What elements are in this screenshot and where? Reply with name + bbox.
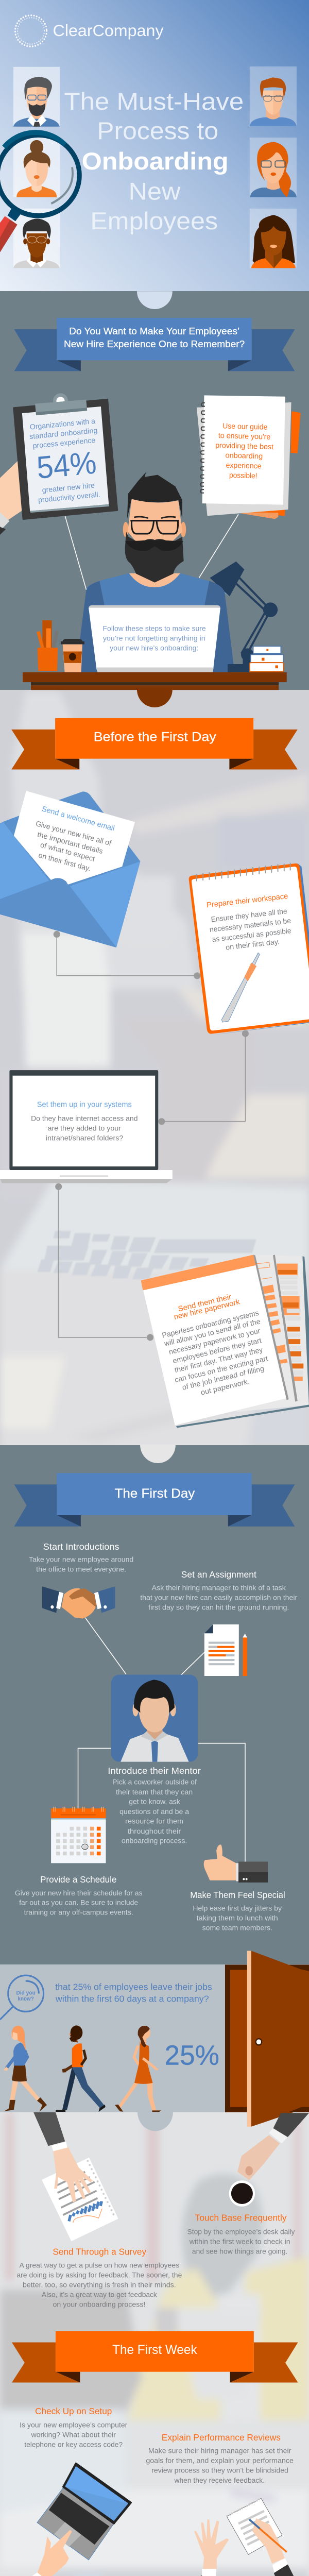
laptop with intro copy: your new hire’s onboarding: xyxy=(110,643,198,652)
portrait cards xyxy=(13,66,297,268)
ribbon heading: the first week xyxy=(12,2331,298,2382)
step: check up on setup: working? What about their xyxy=(30,2430,116,2439)
note text: send them their new hire paperwork: can focus on the exciting part xyxy=(174,1354,268,1384)
note text: use our guide: experience xyxy=(226,461,262,471)
step: introduce their mentor: Introduce their Mentor xyxy=(108,1766,201,1776)
illustration: woman walking in orange dress xyxy=(115,2026,161,2112)
step: set an assignment: Ask their hiring manager to think of a task xyxy=(152,1583,286,1592)
section: before the first day, lower xyxy=(0,1030,309,1428)
step: introduce their mentor: get to know, ask xyxy=(129,1797,180,1806)
section: the first day xyxy=(14,1445,298,1676)
step: send through a survey: Also, it’s a great way to get feedback xyxy=(42,2290,157,2298)
ribbon heading: the first day xyxy=(14,1473,295,1527)
avatar: red-haired woman xyxy=(250,142,297,197)
illustration: hand holding coffee mug xyxy=(229,2113,309,2207)
laptop with intro copy: Follow these steps to make sure xyxy=(103,624,206,633)
connector lines xyxy=(65,514,238,590)
avatar: woman with long dark hair xyxy=(251,215,296,268)
step: provide a schedule xyxy=(15,1874,143,1917)
card: mentor portrait xyxy=(111,1675,198,1762)
orange form on middle page xyxy=(256,1263,288,1364)
step: introduce their mentor: onboarding process. xyxy=(122,1836,187,1845)
note text: use our guide: possible! xyxy=(229,471,258,481)
stat text: 54 percent: Organizations with a xyxy=(29,416,96,431)
title: Onboarding xyxy=(82,147,229,175)
section: before the first day xyxy=(0,689,309,1035)
section background: did you know 25 percent xyxy=(0,1964,309,2112)
avatar: man with aviator glasses xyxy=(13,218,60,268)
ribbon heading: before the first day xyxy=(11,718,298,769)
step: make them feel special: Help ease first day jitters by xyxy=(193,1904,282,1912)
step: start introductions: Start Introductions xyxy=(43,1541,119,1552)
logo: ClearCompany: ClearCompany xyxy=(53,22,164,40)
note text: use our guide: providing the best xyxy=(215,442,273,451)
laptop with intro copy xyxy=(89,605,220,672)
section: hero xyxy=(0,15,297,268)
section background: first day slate xyxy=(0,1445,309,1964)
stat: 25 percent: 25% xyxy=(165,2040,219,2071)
step: start introductions: the office to meet everyone. xyxy=(36,1565,126,1573)
step: touch base frequently: Stop by the employee’s desk daily xyxy=(187,2227,295,2236)
ribbon heading: do you want: New Hire Experience One to Remember? xyxy=(64,338,245,349)
step: introduce their mentor: throughout their xyxy=(128,1826,181,1835)
section background: first week photo xyxy=(0,2112,309,2576)
step: make them feel special xyxy=(190,1890,285,1932)
note text: send them their new hire paperwork: Paperless onboarding systems xyxy=(161,1308,260,1340)
illustration: stacked books xyxy=(228,646,284,672)
step: send through a survey: better, too, so everything is fresh in their minds. xyxy=(23,2280,176,2289)
illustration: desk shelf xyxy=(23,672,287,690)
note text: send a welcome email: of what to expect xyxy=(40,840,96,863)
section: intro xyxy=(0,291,301,690)
step: introduce their mentor: their team that they can xyxy=(116,1787,193,1796)
note text: prepare their workspace: Ensure they have all the xyxy=(211,907,287,924)
note text: prepare their workspace: on their first day. xyxy=(225,937,280,952)
step: introduce their mentor: resource for them xyxy=(125,1817,183,1825)
stat text: 54 percent: process experience xyxy=(32,435,96,450)
step: touch base frequently xyxy=(187,2213,295,2256)
step: make them feel special: taking them to lunch with xyxy=(197,1913,278,1922)
illustration: lamp xyxy=(210,562,278,661)
title: New xyxy=(129,177,181,205)
title xyxy=(64,88,244,234)
stat text: 25 percent leave: within the first 60 days at a company? xyxy=(55,1993,209,2004)
note text: use our guide: to ensure you're xyxy=(218,432,271,442)
illustration: laptop with systems note: Do they have internet access and xyxy=(31,1114,138,1123)
notch connector xyxy=(137,689,173,707)
step: set an assignment xyxy=(140,1570,298,1612)
step: set an assignment: that your new hire can easily accomplish on their xyxy=(140,1593,298,1602)
note text: prepare their workspace: as successful as possible xyxy=(212,926,291,943)
logo: ClearCompany xyxy=(15,15,164,46)
illustration: spiral notebook with workspace note xyxy=(189,863,309,1035)
step: introduce their mentor: Pick a coworker outside of xyxy=(112,1777,197,1786)
note text: send a welcome email: on their first day. xyxy=(38,851,92,873)
notch connector xyxy=(137,291,173,309)
step: provide a schedule: Give your new hire their schedule for as xyxy=(15,1888,143,1897)
step: explain performance reviews xyxy=(146,2433,294,2484)
step: check up on setup xyxy=(20,2406,128,2448)
icon: schedule calendar xyxy=(51,1807,106,1863)
step: set an assignment: first day so they can hit the ground running. xyxy=(148,1603,289,1612)
step: touch base frequently: within the first week to check in xyxy=(189,2237,290,2246)
step: introduce their mentor xyxy=(108,1766,201,1845)
ribbon heading: the first day: The First Day xyxy=(115,1486,195,1501)
note text: send a welcome email xyxy=(35,805,115,873)
note text: use our guide: Use our guide xyxy=(222,422,268,432)
icon: did you know magnifier: know? xyxy=(18,1996,34,2002)
step: explain performance reviews: when they receive feedback. xyxy=(174,2476,265,2484)
step: provide a schedule: Provide a Schedule xyxy=(40,1874,117,1885)
connector lines xyxy=(78,1743,245,1862)
stat text: 54 percent xyxy=(29,416,100,504)
step: provide a schedule: training or any off-campus events. xyxy=(24,1908,133,1917)
title: Process to xyxy=(97,117,218,145)
icon: did you know magnifier xyxy=(0,1975,44,2020)
ribbon heading: do you want: Do You Want to Make Your Employees’ xyxy=(69,326,239,336)
note text: use our guide xyxy=(215,422,273,481)
illustration: paperwork stack xyxy=(141,1255,309,1428)
step: explain performance reviews: review process so they won’t be blindsided xyxy=(151,2466,288,2475)
illustration: writing hand on notepad xyxy=(227,2498,309,2576)
note text: send them their new hire paperwork xyxy=(161,1293,268,1397)
step: check up on setup: Check Up on Setup xyxy=(35,2406,112,2416)
note text: send them their new hire paperwork: will allow you to send all of the xyxy=(163,1317,261,1348)
icon: assignment document and pencil xyxy=(204,1624,247,1676)
step: make them feel special: some team members. xyxy=(202,1923,272,1932)
section: touch base and survey xyxy=(16,2112,309,2309)
note text: send them their new hire paperwork: of the job instead of filling xyxy=(181,1364,265,1392)
note text: send them their new hire paperwork: out paperwork. xyxy=(200,1377,250,1397)
step: introduce their mentor: questions of and be a xyxy=(119,1807,189,1816)
orange form on back page xyxy=(277,1264,303,1381)
illustration: man walking with orange shirt xyxy=(56,2025,106,2112)
note text: send them their new hire paperwork: employees before they start xyxy=(172,1336,262,1365)
connector: envelope to notebook xyxy=(54,931,200,979)
step: provide a schedule: far out as you can. Be sure to include xyxy=(19,1898,139,1907)
illustration: laptop with systems note: are they added to your xyxy=(48,1124,121,1132)
step: start introductions xyxy=(29,1541,133,1573)
title: The Must-Have xyxy=(64,88,244,115)
stat text: 54 percent: 54% xyxy=(36,445,98,485)
step: send through a survey xyxy=(16,2247,182,2309)
stat text: 54 percent: productivity overall. xyxy=(38,490,100,504)
step: explain performance reviews: Make sure their hiring manager has set their xyxy=(148,2446,291,2455)
illustration: coffee cup xyxy=(61,639,84,672)
step: send through a survey: A great way to get a pulse on how new employees xyxy=(19,2261,179,2269)
ribbon heading: the first week: The First Week xyxy=(112,2343,197,2357)
note text: prepare their workspace xyxy=(206,892,291,952)
step: explain performance reviews: goals for them, and explain your performance xyxy=(146,2456,294,2465)
illustration: hand on survey report xyxy=(33,2112,118,2241)
avatar: woman with bun xyxy=(16,140,57,197)
illustration: laptop with pointing hand xyxy=(0,2463,131,2576)
note text: send them their new hire paperwork: their first day. That way they xyxy=(174,1345,264,1374)
section: the first week xyxy=(0,2331,309,2576)
illustration: notebook with guide note xyxy=(197,395,301,519)
notch connector xyxy=(138,2112,173,2131)
avatar: man with red hair xyxy=(250,77,297,126)
note text: send them their new hire paperwork: Send them their xyxy=(177,1293,232,1314)
note text: send a welcome email: the important details xyxy=(37,830,104,855)
connector lines xyxy=(85,1618,205,1675)
notch connector xyxy=(140,1445,176,1463)
connector: notebook to laptop xyxy=(158,1030,249,1125)
ribbon heading: do you want xyxy=(14,318,295,371)
step: touch base frequently: Touch Base Frequently xyxy=(195,2213,287,2223)
note text: use our guide: onboarding xyxy=(225,451,263,461)
icon: did you know magnifier: Did you xyxy=(16,1990,36,1996)
icon: thumbs up xyxy=(204,1844,268,1883)
icon: pen xyxy=(221,953,260,1022)
step: send through a survey: on your onboarding process! xyxy=(53,2300,145,2309)
illustration: open raised hand xyxy=(194,2519,229,2576)
connector: laptop to paperwork xyxy=(55,1183,153,1341)
ribbon heading: before the first day: Before the First Day xyxy=(94,730,217,744)
step: send through a survey: are doing is by asking for feedback. The sooner, the xyxy=(16,2270,182,2279)
step: make them feel special: Make Them Feel Special xyxy=(190,1890,285,1900)
section background: hero gradient xyxy=(0,0,309,291)
section: did you know 25 percent xyxy=(0,1951,309,2131)
step: explain performance reviews: Explain Performance Reviews xyxy=(162,2433,281,2443)
note text: send a welcome email: Give your new hire all of xyxy=(35,819,112,848)
stat text: 54 percent: greater new hire xyxy=(42,481,95,494)
step: set an assignment: Set an Assignment xyxy=(181,1570,256,1580)
illustration: laptop with systems note xyxy=(0,1070,173,1183)
illustration: envelope with welcome email note xyxy=(0,791,140,947)
note text: send them their new hire paperwork: necessary paperwork to your xyxy=(168,1326,261,1356)
illustration: bearded man at laptop xyxy=(76,472,234,672)
illustration: hand holding clipboard with 54 percent stat xyxy=(0,393,117,535)
step: check up on setup: telephone or key access code? xyxy=(24,2440,123,2448)
stat text: 54 percent: standard onboarding xyxy=(29,426,98,440)
step: start introductions: Take your new employee around xyxy=(29,1555,133,1564)
illustration: pencil cup xyxy=(37,620,59,671)
step: send through a survey: Send Through a Survey xyxy=(53,2247,147,2257)
stat text: 25 percent leave: that 25% of employees leave their jobs xyxy=(55,1981,212,1992)
note text: prepare their workspace: Prepare their workspace xyxy=(206,892,288,910)
illustration: open door xyxy=(225,1951,309,2127)
illustration: woman walking with blue top xyxy=(4,2026,47,2112)
section background: intro slate xyxy=(0,291,309,690)
note text: send a welcome email: Send a welcome email xyxy=(41,805,115,833)
section background: before the first day photo xyxy=(0,690,309,1459)
note text: prepare their workspace: necessary materials to be xyxy=(209,916,291,934)
title: Employees xyxy=(90,207,218,234)
illustration: laptop with systems note: intranet/shared folders? xyxy=(46,1133,124,1142)
laptop with intro copy: you’re not forgetting anything in xyxy=(103,634,205,642)
step: touch base frequently: and see how things are going. xyxy=(192,2247,287,2256)
step: check up on setup: Is your new employee’s computer xyxy=(20,2420,128,2429)
icon: handshake xyxy=(42,1586,115,1619)
avatar: bearded man with blue glasses xyxy=(13,77,60,127)
note text: send them their new hire paperwork: new hire paperwork xyxy=(173,1298,241,1321)
stat text: 25 percent leave xyxy=(55,1981,212,2004)
icon: magnifying glass xyxy=(0,132,79,252)
illustration: laptop with systems note: Set them up in your systems xyxy=(37,1100,132,1109)
